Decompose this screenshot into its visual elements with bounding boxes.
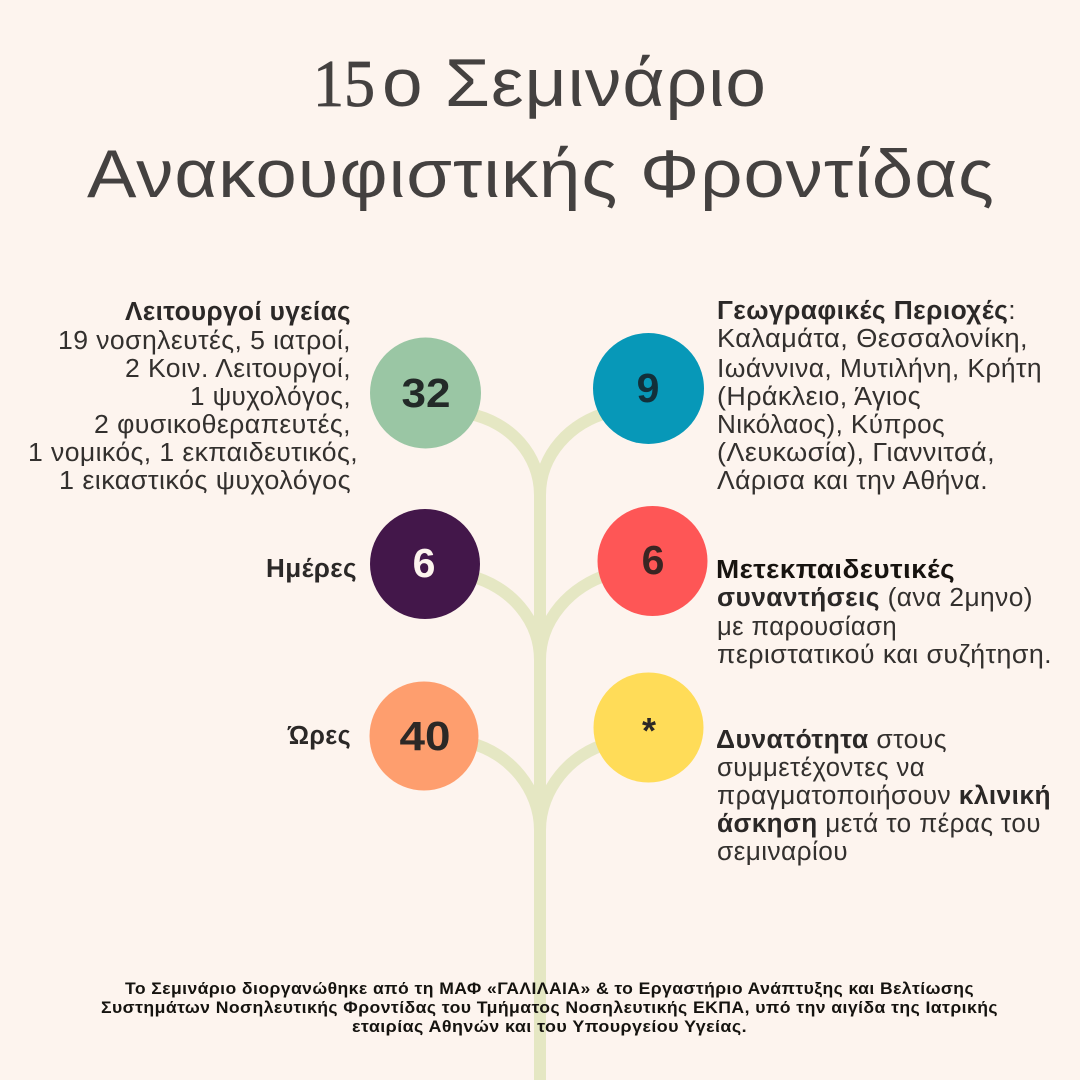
text: geographic regions: Νικόλαος), Κύπρος: [717, 411, 945, 439]
text: geographic regions: [717, 297, 1042, 495]
text: clinical practice: πραγματοποιήσουν κλινική: [717, 782, 1051, 810]
circle: 32: 32: [402, 370, 450, 416]
text: postgraduate meetings: περιστατικού και συζήτηση.: [717, 641, 1052, 669]
text: postgraduate meetings: συναντήσεις (ανα 2μηνο): [717, 584, 1033, 612]
text: health professionals: Λειτουργοί υγείας: [125, 298, 351, 326]
text: clinical practice: άσκηση μετά το πέρας του: [717, 810, 1041, 838]
text: health professionals: 1 νομικός, 1 εκπαιδευτικός,: [28, 439, 358, 467]
text: clinical practice: Δυνατότητα στους: [716, 726, 947, 754]
label: hours: Ώρες: [287, 722, 351, 750]
text: postgraduate meetings: με παρουσίαση: [717, 613, 897, 641]
text: postgraduate meetings: [716, 556, 1052, 669]
circle: 40: 40: [400, 713, 450, 759]
text: health professionals: 1 εικαστικός ψυχολόγος: [59, 467, 351, 495]
text: health professionals: 19 νοσηλευτές, 5 ιατροί,: [58, 327, 351, 355]
text: health professionals: 1 ψυχολόγος,: [190, 383, 351, 411]
footer note: Το Σεμινάριο διοργανώθηκε από τη ΜΑΦ «ΓΑΛΙΛΑΙΑ» & το Εργαστήριο Ανάπτυξης και Βελτίωσης: [125, 980, 974, 998]
circle: asterisk: *: [642, 710, 656, 751]
title: 15: [313, 47, 375, 121]
text: geographic regions: Λάρισα και την Αθήνα.: [717, 467, 988, 495]
footer note: [101, 980, 998, 1036]
text: health professionals: 2 Κοιν. Λειτουργοί,: [125, 355, 351, 383]
text: health professionals: 2 φυσικοθεραπευτές,: [94, 411, 351, 439]
circle: 9: 9: [637, 365, 659, 411]
title: [87, 45, 995, 212]
circle: 40: [370, 682, 478, 790]
footer note: εταιρίας Αθηνών και του Υπουργείου Υγείας.: [352, 1018, 747, 1036]
circle: 6 days: [370, 509, 480, 619]
circle: 32: [370, 338, 481, 448]
text: geographic regions: Καλαμάτα, Θεσσαλονίκη,: [717, 325, 1028, 353]
circle: asterisk: [594, 672, 704, 782]
text: geographic regions: Ιωάννινα, Μυτιλήνη, Κρήτη: [717, 355, 1042, 383]
title: ο Σεμινάριο: [382, 45, 767, 121]
text: clinical practice: [716, 726, 1051, 866]
circle: 6 days: 6: [413, 540, 435, 586]
circle: 9: [593, 333, 704, 444]
title: Ανακουφιστικής Φροντίδας: [87, 136, 995, 212]
text: geographic regions: Γεωγραφικές Περιοχές :: [717, 297, 1016, 325]
text: postgraduate meetings: Μετεκπαιδευτικές: [716, 556, 955, 584]
circle: 6 meetings: [598, 506, 708, 616]
text: health professionals: [28, 298, 358, 495]
text: geographic regions: (Λευκωσία), Γιαννιτσά,: [717, 439, 995, 467]
footer note: Συστημάτων Νοσηλευτικής Φροντίδας του Τμήματος Νοσηλευτικής ΕΚΠΑ, υπό την αιγίδα της Ιατρικής: [101, 999, 998, 1017]
text: clinical practice: συμμετέχοντες να: [717, 754, 925, 782]
circle: 6 meetings: 6: [642, 537, 664, 583]
text: clinical practice: σεμιναρίου: [717, 838, 848, 866]
tree: trunk and branches: [470, 412, 610, 1080]
label: days: Ημέρες: [266, 555, 357, 583]
text: geographic regions: (Ηράκλειο, Άγιος: [717, 383, 921, 411]
